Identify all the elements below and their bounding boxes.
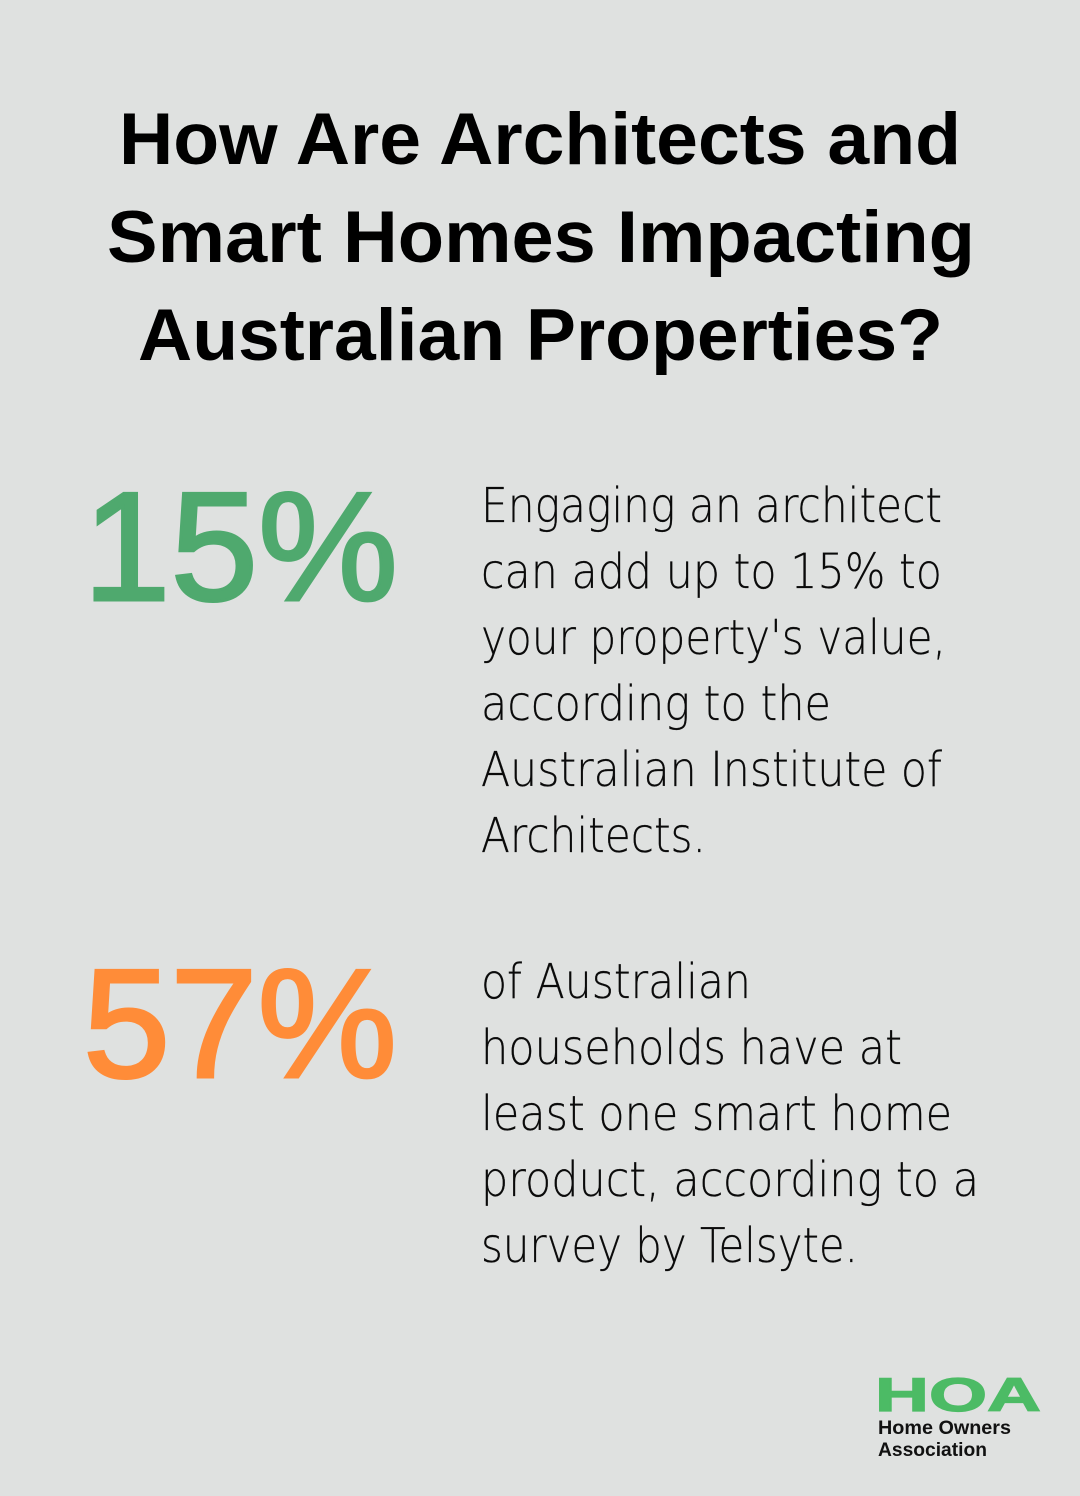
text block: smart home households: product, according to a [481, 1152, 979, 1208]
title [107, 99, 975, 376]
title: Smart Homes Impacting [107, 197, 975, 278]
stat: 15%: 15% [83, 460, 398, 633]
text block: smart home households [481, 954, 979, 1274]
text block: architect value: can add up to 15% to [481, 544, 942, 600]
title: How Are Architects and [119, 99, 961, 180]
text block: architect value: your property's value, [481, 610, 946, 666]
text block: smart home households: survey by Telsyte. [481, 1218, 858, 1274]
text block: architect value [481, 478, 946, 864]
text block: smart home households: of Australian [481, 954, 751, 1010]
text block: architect value: Engaging an architect [481, 478, 942, 534]
logo: Home Owners Association [875, 1368, 1041, 1461]
text block: smart home households: least one smart home [481, 1086, 952, 1142]
stat: 57%: 57% [83, 937, 397, 1110]
logo: Home Owners Association: HOA [875, 1368, 1041, 1421]
text block: architect value: Australian Institute of [481, 742, 942, 798]
title: Australian Properties? [138, 295, 943, 376]
logo: Home Owners Association: Home Owners [878, 1418, 1011, 1439]
text block: architect value: according to the [481, 676, 831, 732]
text block: smart home households: households have at [481, 1020, 902, 1076]
text block: architect value: Architects. [481, 808, 706, 864]
logo: Home Owners Association: Association [878, 1440, 987, 1461]
